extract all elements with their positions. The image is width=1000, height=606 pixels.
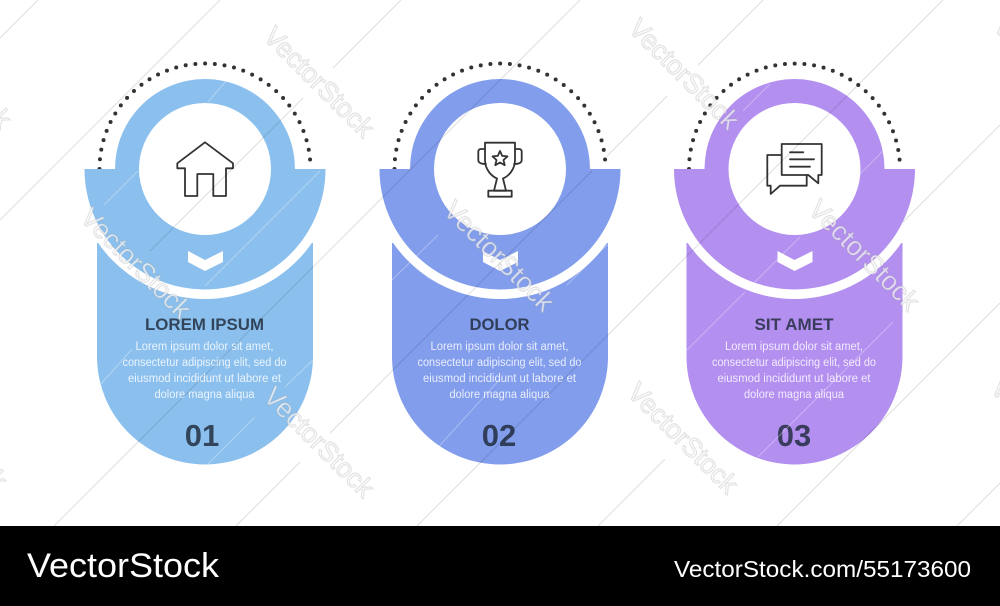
upper badge 2 xyxy=(380,79,620,290)
body text 1: eiusmod incididunt ut labore et xyxy=(128,373,282,385)
body text 1: consectetur adipiscing elit, sed do xyxy=(122,357,286,369)
heading 1: LOREM IPSUM xyxy=(145,316,264,334)
body text 3 xyxy=(712,341,876,401)
footer bar xyxy=(0,526,1000,606)
white icon circle 1 xyxy=(139,103,271,235)
dotted arc 2 xyxy=(394,64,606,169)
lower card 2 xyxy=(392,243,608,465)
body text 1: Lorem ipsum dolor sit amet, xyxy=(136,341,274,353)
chevron 2 xyxy=(483,251,518,271)
watermark text: VectorStock xyxy=(258,381,380,504)
watermark text: VectorStock xyxy=(622,377,744,500)
chevron 3 xyxy=(778,251,812,271)
body text 2: eiusmod incididunt ut labore et xyxy=(423,373,577,385)
watermark text: VectorStock xyxy=(803,194,925,317)
panel: step 1 xyxy=(75,39,335,464)
body text 2: Lorem ipsum dolor sit amet, xyxy=(430,341,568,353)
upper badge 1 xyxy=(84,79,326,290)
white icon circle 3 xyxy=(728,103,860,235)
footer image id: VectorStock.com/55173600 xyxy=(674,556,971,582)
watermark text: VectorStock xyxy=(258,21,380,144)
watermark text: VectorStock xyxy=(75,202,197,325)
heading 2: DOLOR xyxy=(470,316,530,334)
body text 1 xyxy=(122,341,286,401)
body text 3: consectetur adipiscing elit, sed do xyxy=(712,357,876,369)
white icon circle 2 xyxy=(434,103,566,235)
panel: step 2 xyxy=(370,39,630,465)
watermark text: VectorStock xyxy=(623,13,745,136)
icon: speech bubbles xyxy=(767,144,822,194)
white separator arc 1 xyxy=(75,39,335,299)
body text 2: dolore magna aliqua xyxy=(450,389,550,401)
dotted arc 3 xyxy=(689,64,900,169)
heading 3: SIT AMET xyxy=(754,316,834,334)
watermark text: VectorStock xyxy=(438,195,560,318)
body text 3: Lorem ipsum dolor sit amet, xyxy=(725,341,863,353)
number 01: 01 xyxy=(185,418,219,453)
body text 1: dolore magna aliqua xyxy=(154,389,255,401)
white separator arc 3 xyxy=(664,39,924,299)
dotted arc 1 xyxy=(100,64,310,169)
body text 3: dolore magna aliqua xyxy=(744,389,845,401)
body text 2: consectetur adipiscing elit, sed do xyxy=(418,357,582,369)
white separator arc 2 xyxy=(370,39,630,299)
panel: step 3 xyxy=(664,39,924,465)
lower card 3 xyxy=(686,243,902,465)
body text 3: eiusmod incididunt ut labore et xyxy=(718,373,871,385)
footer brand: VectorStock xyxy=(27,547,220,585)
chevron 1 xyxy=(188,251,223,271)
number 03: 03 xyxy=(777,418,811,453)
upper badge 3 xyxy=(674,79,915,290)
icon: trophy xyxy=(478,143,522,197)
icon: house xyxy=(177,142,233,196)
body text 2 xyxy=(418,341,582,401)
number 02: 02 xyxy=(482,418,516,453)
lower card 1 xyxy=(97,243,313,464)
